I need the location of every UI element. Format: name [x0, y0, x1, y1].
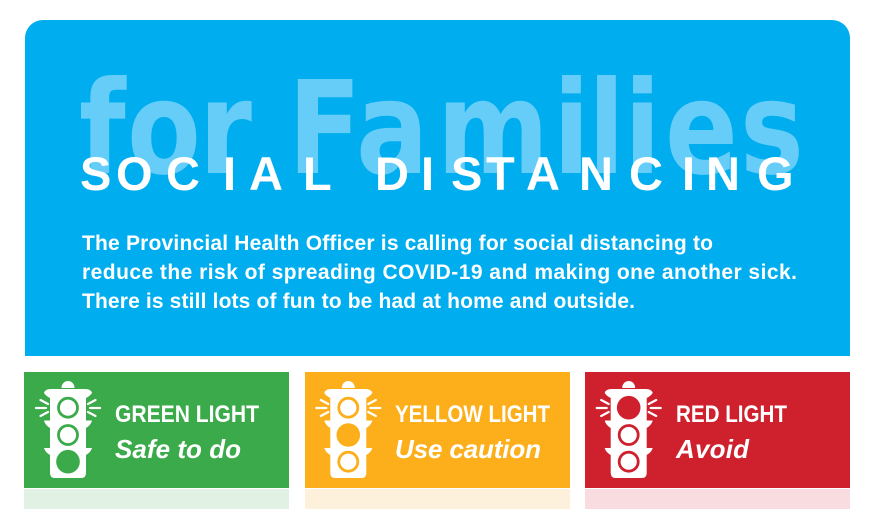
green pale strip	[24, 489, 289, 509]
panel: yellow light	[305, 372, 570, 509]
panel: green light	[24, 372, 289, 509]
title: social distancing: SOCIALDISTANCING	[80, 147, 794, 200]
yellow heading: YELLOW LIGHT	[395, 401, 550, 428]
icon: green traffic light	[36, 381, 100, 478]
panel: red light	[585, 372, 850, 509]
intro text	[82, 232, 797, 313]
green heading: GREEN LIGHT	[115, 401, 259, 428]
green subheading: Safe to do	[115, 434, 241, 464]
red heading: RED LIGHT	[676, 401, 787, 428]
icon: red traffic light	[597, 381, 661, 478]
intro text: There is still lots of fun to be had at home and outside.	[82, 290, 635, 313]
yellow card background	[305, 372, 570, 488]
red subheading: Avoid	[675, 434, 750, 464]
watermark heading: for Families: for Families	[79, 53, 804, 203]
red card background	[585, 372, 850, 488]
green card background	[24, 372, 289, 488]
panel: header	[25, 20, 850, 356]
header background	[25, 20, 850, 356]
yellow subheading: Use caution	[395, 434, 541, 464]
red pale strip	[585, 489, 850, 509]
intro text: The Provincial Health Officer is calling for social distancing to	[82, 232, 713, 255]
icon: yellow traffic light	[316, 381, 380, 478]
intro text: reduce the risk of spreading COVID-19 and making one another sick.	[82, 261, 797, 284]
yellow pale strip	[305, 489, 570, 509]
